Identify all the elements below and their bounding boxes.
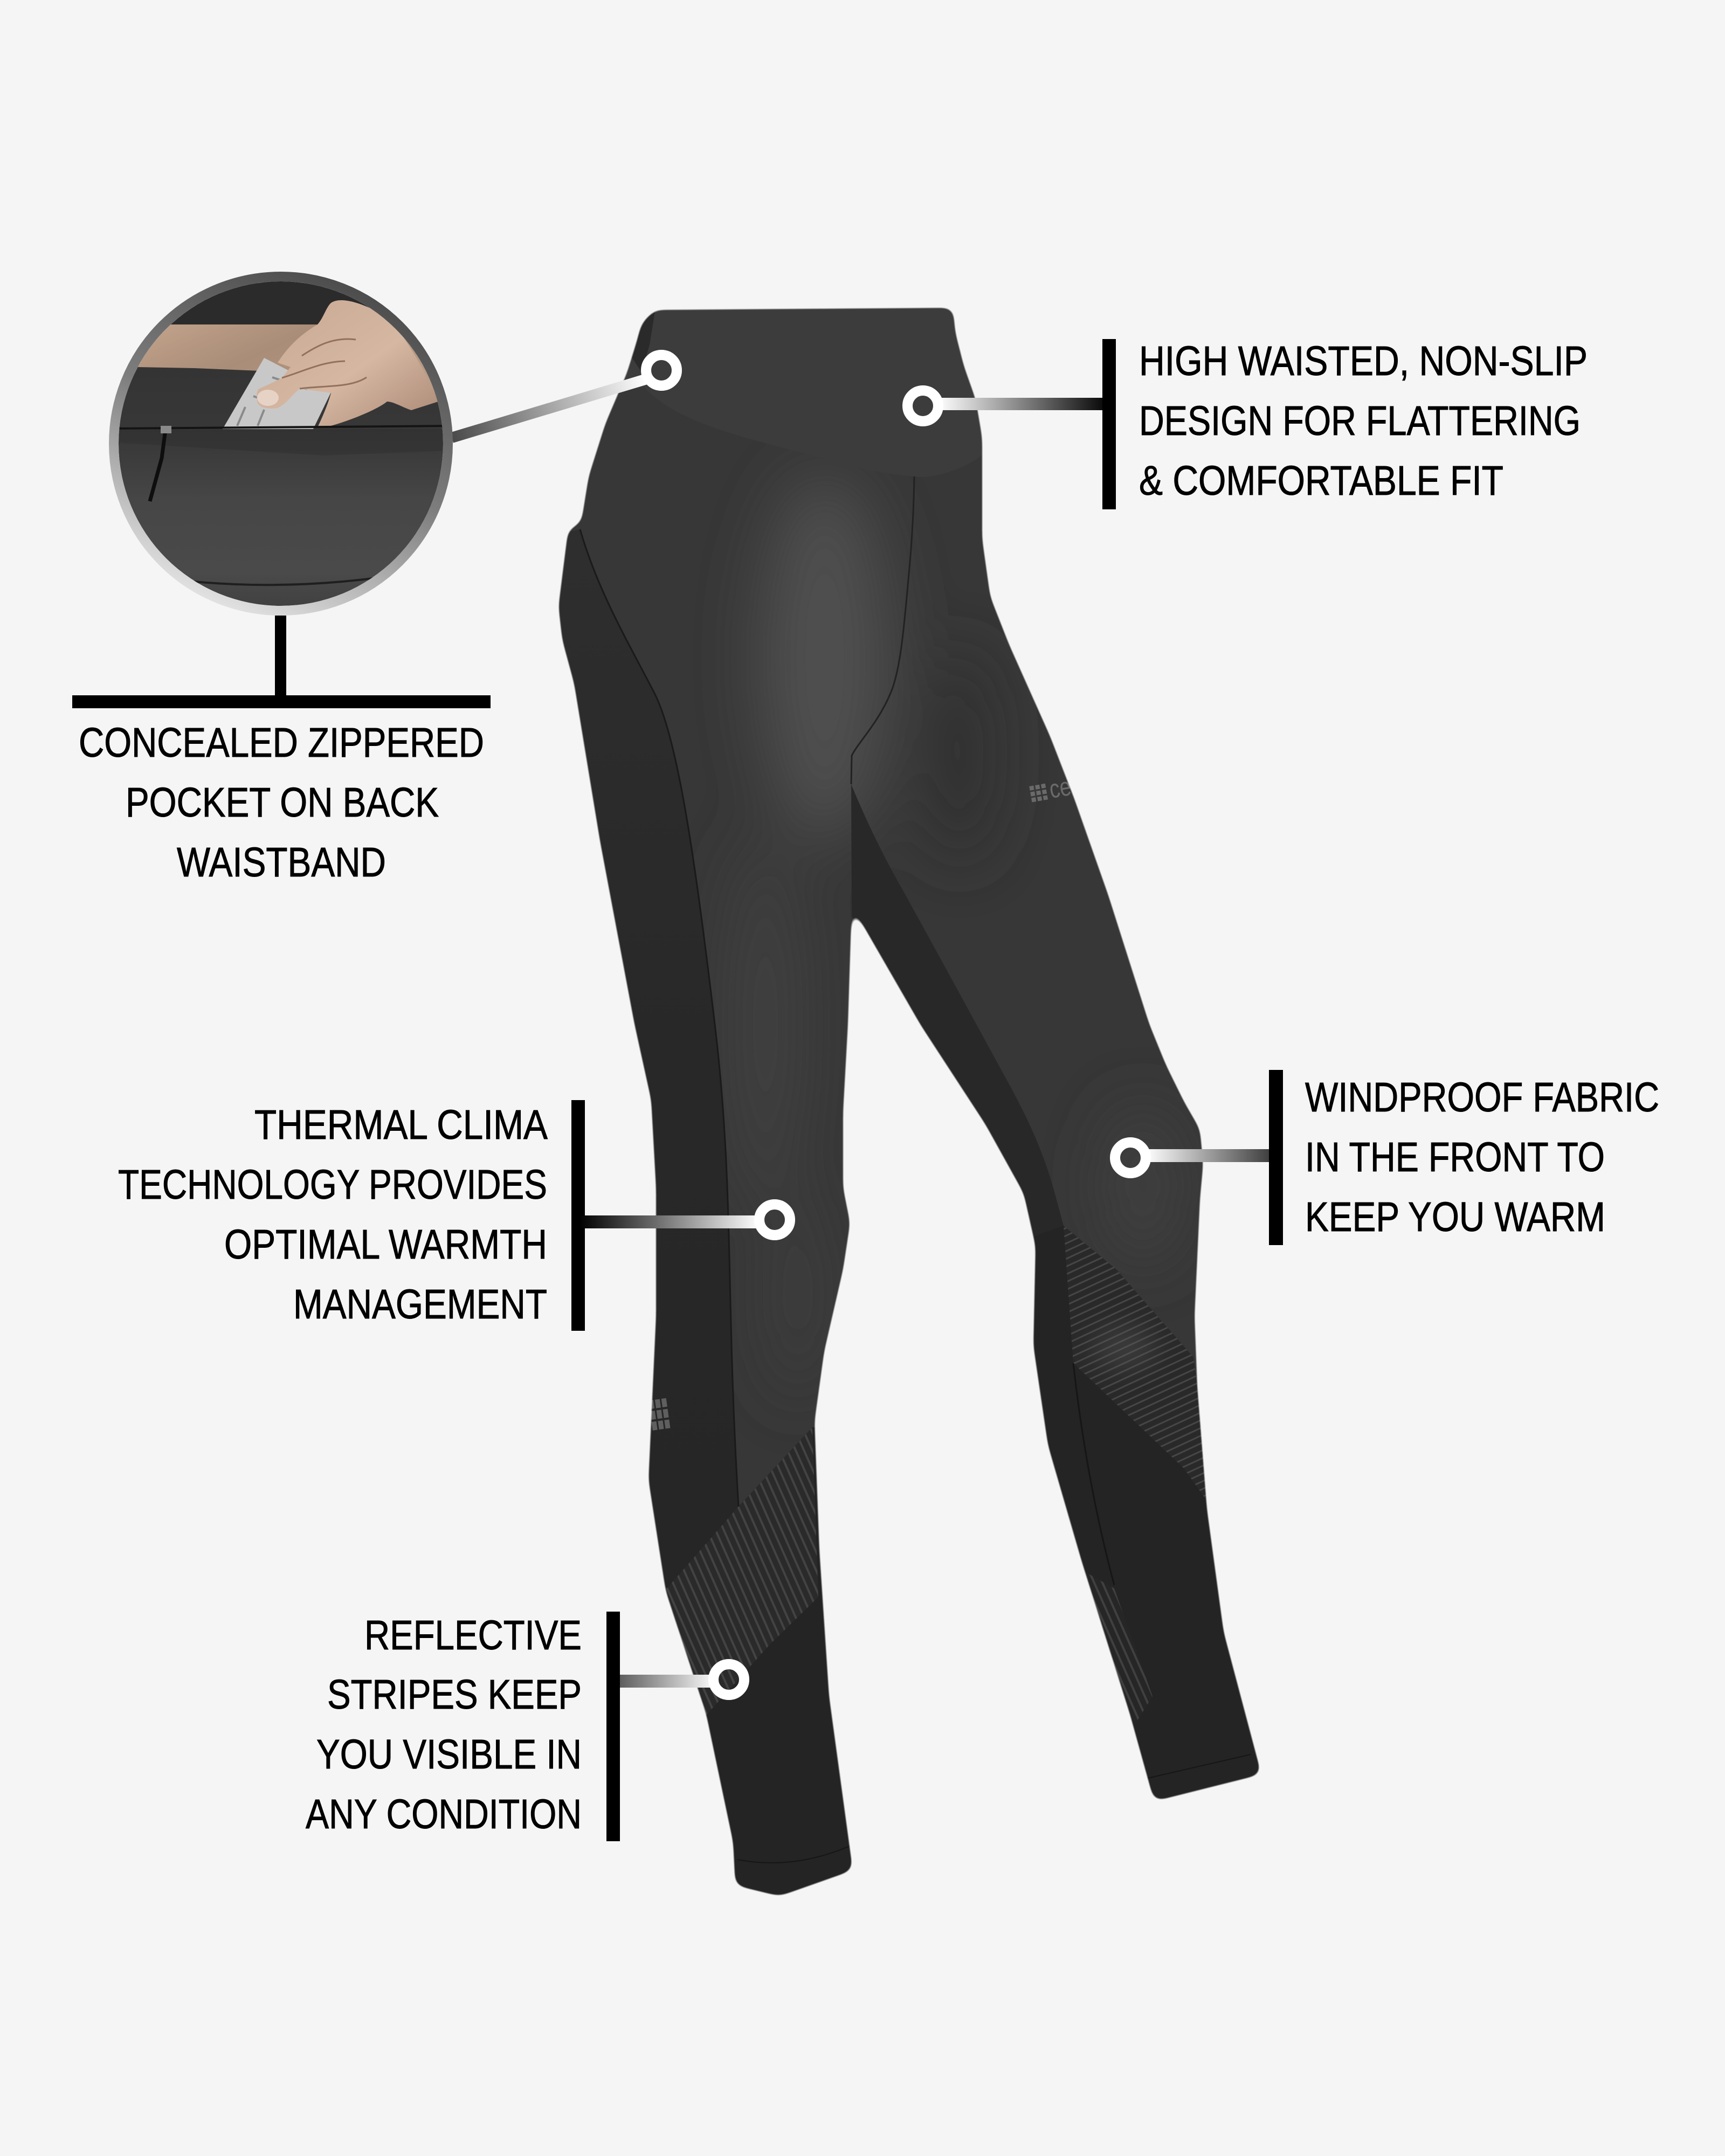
- text: reflective stripes: REFLECTIVE: [364, 1612, 582, 1659]
- text: concealed zippered pocket: [79, 720, 484, 886]
- text: reflective stripes: [306, 1612, 582, 1837]
- zipper slider: [161, 426, 171, 433]
- connector: high waist: [938, 339, 1116, 509]
- pocket fabric: [108, 367, 453, 609]
- right leg lower reflective stripes: [1083, 1571, 1153, 1725]
- hem stitching left: [737, 1846, 850, 1863]
- logo on left calf: [648, 1398, 670, 1431]
- side seam: [580, 529, 739, 1507]
- logo on right thigh: [1028, 772, 1073, 807]
- text: high waisted: & COMFORTABLE FIT: [1139, 458, 1503, 504]
- finger lines: [282, 339, 367, 389]
- crotch seam: [851, 476, 914, 784]
- card print: [237, 377, 307, 426]
- left leg lower calf panel: [706, 1427, 852, 1895]
- waistband: [609, 307, 986, 477]
- text: concealed zippered pocket: CONCEALED ZIPPERED: [79, 720, 484, 766]
- product photo: black leggings: [558, 307, 1259, 1896]
- marker: high waist: [908, 390, 938, 421]
- fabric highlight: front thigh: [746, 476, 903, 844]
- text: high waisted: DESIGN FOR FLATTERING: [1139, 398, 1581, 444]
- marker: left waist: [646, 355, 677, 386]
- marker: thermal: [759, 1204, 790, 1235]
- text: windproof: IN THE FRONT TO: [1305, 1134, 1605, 1180]
- pocket fold shadow: [108, 429, 464, 455]
- hem stitching right: [1146, 1754, 1251, 1779]
- card: [223, 358, 331, 429]
- lower hem fold: [189, 578, 377, 585]
- text: concealed zippered pocket: POCKET ON BACK: [126, 779, 439, 826]
- text: thermal clima: [118, 1102, 548, 1328]
- callout: pocket detail circle: [108, 275, 464, 611]
- connector stem and rule: pocket label: [72, 616, 491, 708]
- right leg dark inner panel: [851, 784, 1073, 1363]
- text: concealed zippered pocket: WAISTBAND: [177, 839, 386, 886]
- circle photo: pocket and hand: [108, 275, 464, 609]
- zipper line: [119, 426, 464, 429]
- left leg dark side panel: [560, 529, 739, 1588]
- leggings base fabric: [569, 347, 1203, 1589]
- logo on right thigh: ce: [1047, 772, 1073, 804]
- text: thermal clima: MANAGEMENT: [293, 1281, 547, 1328]
- text: thermal clima: TECHNOLOGY PROVIDES: [118, 1162, 547, 1208]
- calf seam: [1073, 1363, 1114, 1585]
- zipper pull: [150, 430, 165, 501]
- marker: reflective: [714, 1664, 744, 1695]
- bare skin: [108, 324, 453, 402]
- connector: pocket circle to waist: [452, 379, 647, 438]
- text: thermal clima: OPTIMAL WARMTH: [224, 1221, 547, 1268]
- marker: windproof: [1115, 1143, 1146, 1173]
- connector: thermal: [571, 1100, 763, 1331]
- text: windproof: [1305, 1074, 1659, 1240]
- thumbnail: [257, 390, 279, 406]
- circle gradient ring: [114, 277, 448, 611]
- right leg stripes highlight: [1092, 1326, 1156, 1369]
- text: windproof: WINDPROOF FABRIC: [1305, 1074, 1659, 1121]
- text: high waisted: [1139, 338, 1588, 504]
- text: reflective stripes: YOU VISIBLE IN: [316, 1731, 582, 1778]
- text: thermal clima: THERMAL CLIMA: [254, 1102, 548, 1148]
- hand: [257, 300, 438, 428]
- right leg lower calf panel: [1024, 1226, 1294, 1833]
- waistband side flap: [631, 312, 655, 372]
- text: windproof: KEEP YOU WARM: [1305, 1194, 1605, 1240]
- text: high waisted: HIGH WAISTED, NON-SLIP: [1139, 338, 1588, 384]
- connector: windproof: [1146, 1070, 1283, 1245]
- connector: reflective: [606, 1612, 717, 1841]
- text: reflective stripes: ANY CONDITION: [306, 1791, 582, 1837]
- upper black band: [108, 275, 453, 324]
- right leg upper reflective stripes: [1064, 1226, 1213, 1509]
- left leg reflective stripes: [666, 1428, 818, 1715]
- text: reflective stripes: STRIPES KEEP: [327, 1671, 582, 1718]
